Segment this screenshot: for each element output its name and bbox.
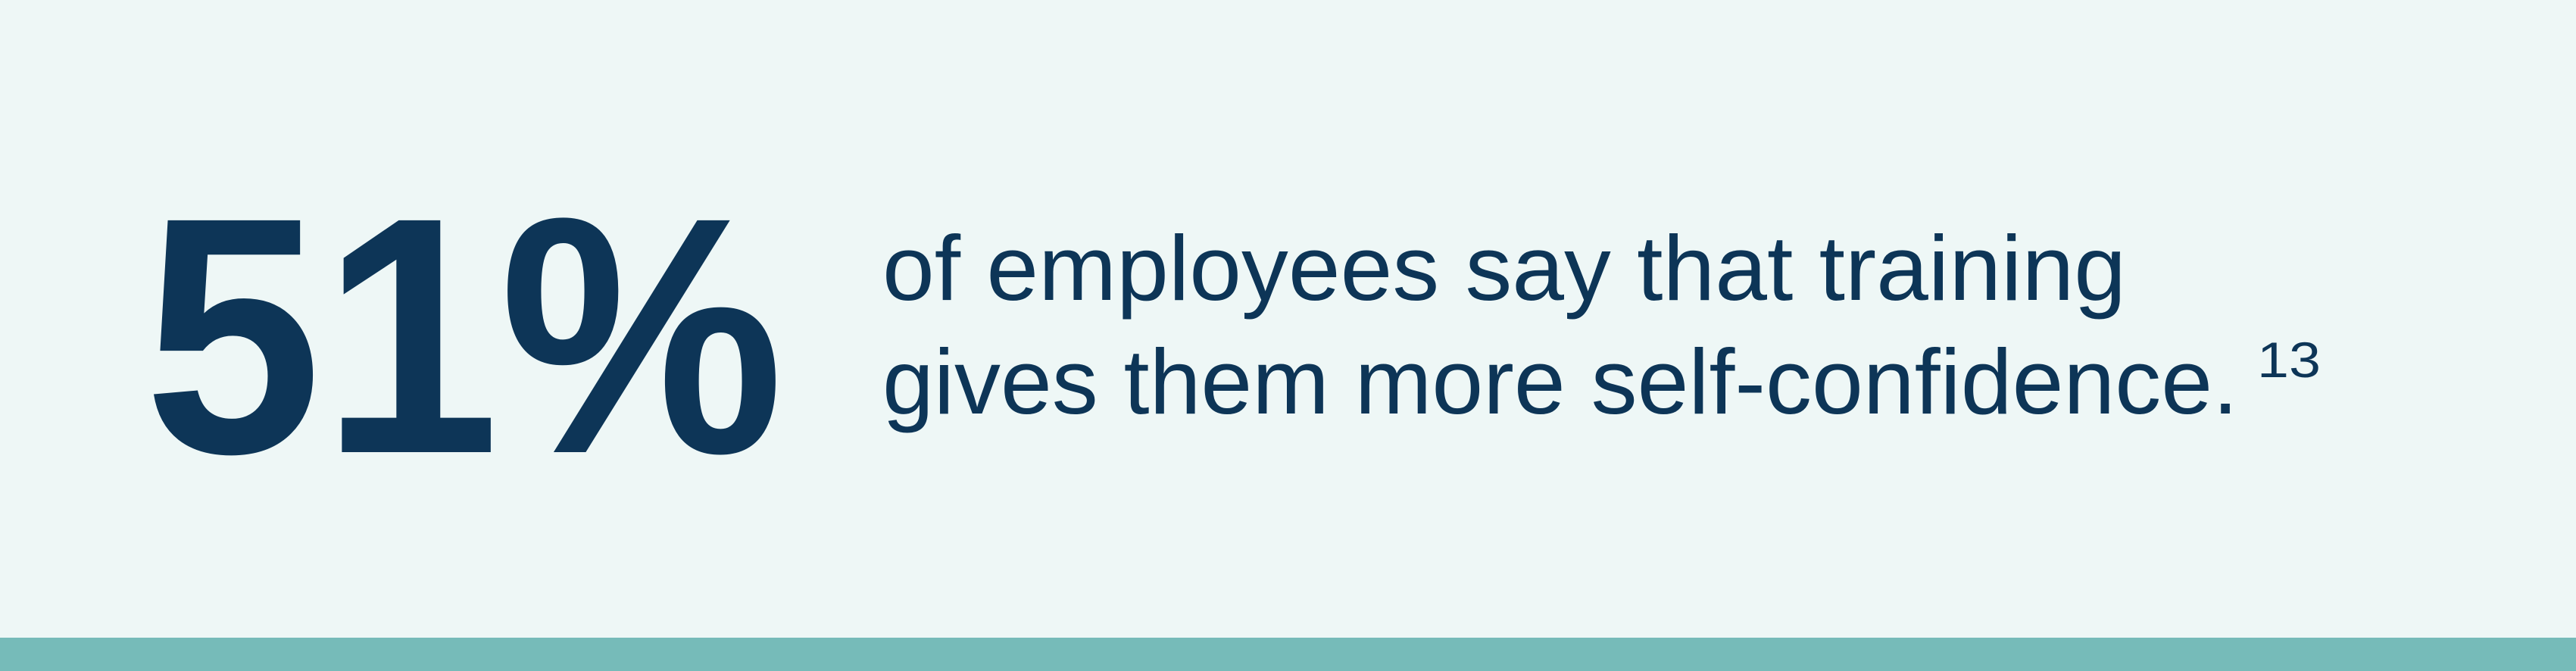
bottom bar [0,638,2576,671]
footnote superscript: 13 [2257,332,2321,388]
line 2: gives them more self-confidence. [882,330,2238,433]
line 1: of employees say that training [882,217,2126,320]
statement text [882,217,2321,433]
big stat: 51%: 51% [144,148,784,524]
